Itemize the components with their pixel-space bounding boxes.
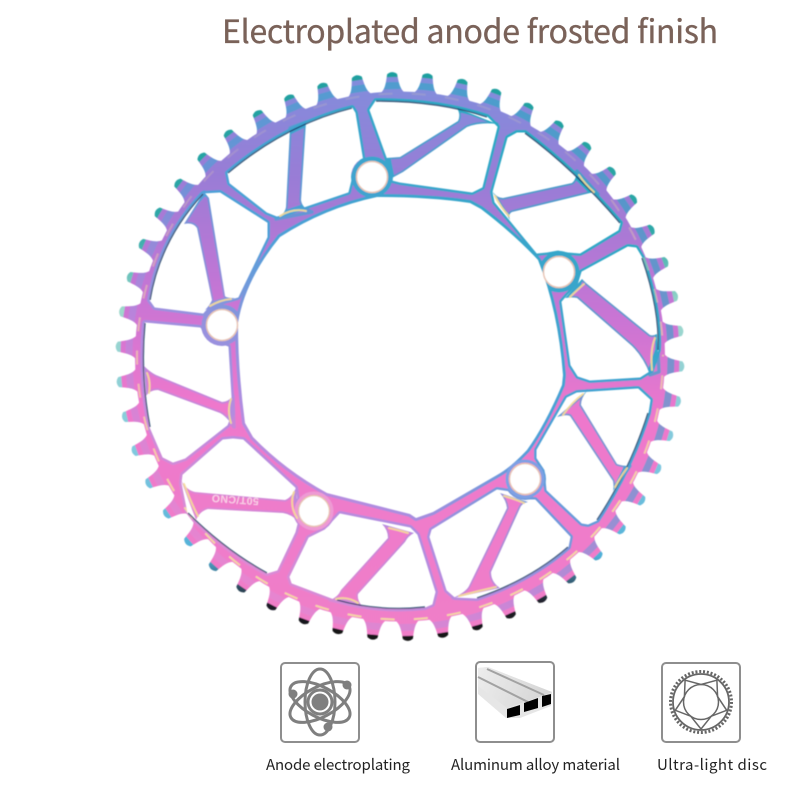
label: ultra-light disc: Ultra-light disc bbox=[657, 754, 767, 775]
icon: ultra-light disc bbox=[662, 663, 740, 742]
chainring: iridescent 50-tooth disc bbox=[100, 60, 700, 660]
icon: atom bbox=[281, 663, 359, 742]
label: aluminum alloy material: Aluminum alloy material bbox=[451, 754, 620, 775]
chainring body with teeth, windows and struts bbox=[100, 60, 700, 660]
label: anode electroplating: Anode electroplating bbox=[266, 754, 411, 775]
engraved upside-down mark on strut: 50T/CNO bbox=[211, 492, 259, 507]
title: Electroplated anode frosted finish bbox=[222, 7, 718, 53]
window dark outer arcs bbox=[143, 101, 658, 608]
icon: aluminum profile tubes bbox=[476, 662, 554, 742]
bolt hole rims bbox=[206, 162, 574, 526]
strut end highlights bbox=[147, 175, 655, 603]
